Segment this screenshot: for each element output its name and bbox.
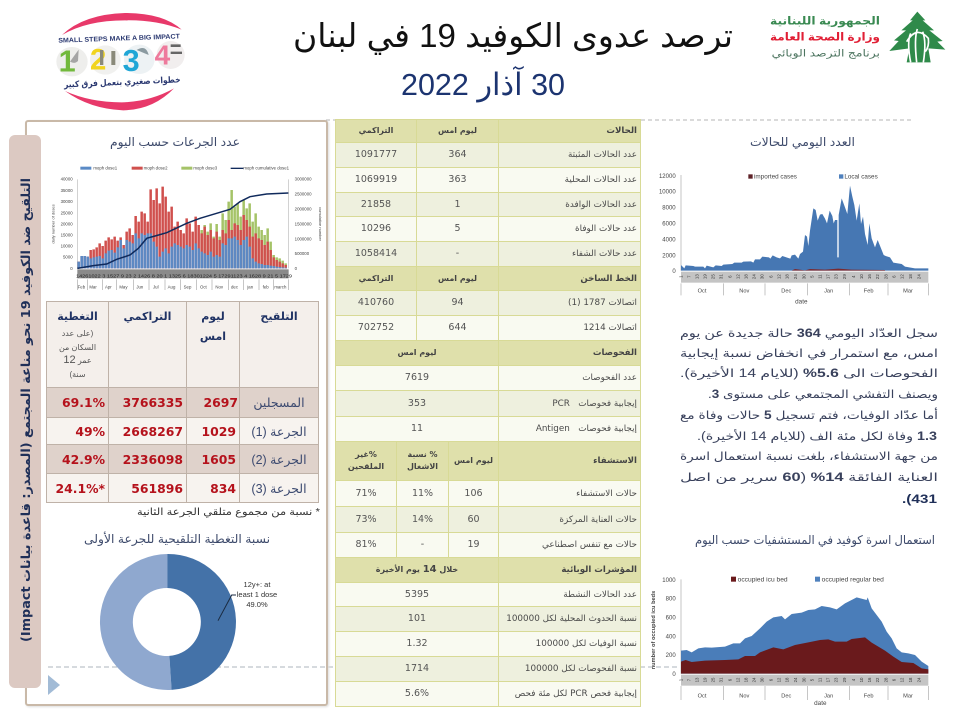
local cases area [681,186,928,271]
chart: daily cases: 6 [768,275,773,278]
month labels: Jan [824,693,833,699]
dose 2 bars [79,187,286,268]
donut label: least 1 dose [237,590,277,599]
section: tests: ليوم امس [398,348,436,357]
chart: hospital beds: 1 [679,678,684,681]
table header row: التلقيح [260,311,298,323]
table header row: سنة) [69,370,86,378]
month labels: Sep [184,285,192,290]
row: registered: المسجلين [253,396,305,410]
chart: daily cases: 12 [900,274,905,279]
legend: moph cumulative dose1 [243,166,290,171]
chart: hospital beds: 30 [801,677,806,682]
month labels: Oct [200,285,208,290]
chart: hospital beds: 10 [859,677,864,682]
heading: hospital beds: استعمال اسرة كوفيد في المستشفيات حسب اليوم [695,533,935,548]
month labels: Mar [903,693,913,699]
chart: daily cases: 13 [694,274,699,279]
sidebar text: التلقيح ضد الكوفيد 19 نحو مناعة المجتمع (المصدر: قاعدة بيانات Impact) [18,178,33,642]
logo: small steps make a big impact: 3 [123,44,140,78]
y axis: 0 [672,269,676,275]
logo: small steps make a big impact: 2 [90,44,106,77]
text block: daily summary: ويصنف التفشي المجتمعي على مستوى 3. [708,389,938,402]
table header row: ليوم امس [200,311,226,343]
axes labels: 30000 [61,199,73,204]
month labels: march [274,285,287,290]
month labels: Oct [698,289,707,295]
section: cases: إيجابية فحص PCR لكل مئة فحص [515,689,637,699]
month labels: Oct [698,693,707,699]
table header row: (على عدد [62,329,93,338]
chart: daily cases: 23 [834,274,839,279]
section: cases: عدد الفحوصات [582,373,637,383]
logo: small steps make a big impact: 1 [59,45,76,79]
section: cases: 11 [411,423,423,434]
text block: daily summary: من جهة الاستشفاء، بلغت نسبة استعمال اسرة [680,451,938,464]
section: cases: 1091777 [355,149,397,160]
table header row: التغطية [57,311,98,323]
chart: hospital beds: 5 [810,678,815,681]
chart: daily cases: 28 [883,274,888,279]
chart: hospital beds: 23 [834,677,839,682]
chart: daily cases: 4 [851,275,856,278]
section: cases: إيجابية فحوصات Antigen [536,424,637,434]
chart: hospital beds: 31 [718,677,723,682]
section: cases: عدد حالات الوفاة [575,224,637,234]
section: hospitalization: %غير [355,450,377,459]
logo: small steps make a big impact: SMALL STEPS MAKE A BIG IMPACT [58,33,180,45]
chart: hospital beds: 4 [851,678,856,681]
month labels: Nov [739,693,750,699]
month labels: Jul [153,285,159,290]
table: vaccination figures [46,301,319,503]
table header row: عمر 12 [63,354,92,366]
chart: hospital beds: 30 [760,677,765,682]
heading: daily cases: العدد اليومي للحالات [750,135,855,150]
logo: small steps make a big impact [56,13,184,110]
month labels: Jan [824,289,833,295]
y axis [662,578,676,678]
section: cases: 5395 [405,588,429,600]
section: cases: إيجابية فحوصات PCR [552,398,637,408]
row: dose 2 [47,445,318,473]
axes labels: 1500000 [295,221,312,226]
row: dose 1 [47,418,318,444]
month labels: Nov [215,285,224,290]
row: dose 3: 561896 [131,480,183,496]
chart: hospital beds: 6 [892,678,897,681]
chart: hospital beds: 18 [785,677,790,682]
chart: hospital beds: 22 [875,677,880,682]
section: cases: 60 [467,514,480,524]
icu bed area [681,637,928,674]
section: cases: 14% [412,514,433,524]
month labels: dec [231,285,239,290]
chart: daily cases: 22 [875,274,880,279]
section: cases: 1069919 [355,174,397,185]
donut label: 49.0% [246,600,268,609]
imported cases area [792,269,885,271]
chart: daily cases: 1 [679,275,684,278]
logo: ministry of public health: وزارة الصحة العامة [770,31,880,43]
section: epidemic indicators [336,558,640,582]
chart: hospital beds: 18 [743,677,748,682]
axes labels: 25000 [61,210,73,215]
donut label: 12y+: at [244,580,271,589]
row: dose 1: 2668267 [123,424,183,438]
legend [80,166,290,171]
donut chart: first dose coverage [100,554,277,690]
axes labels: 35000 [61,188,73,193]
section: cases: حالات الاستشفاء [576,488,637,498]
section: cases: 71% [355,488,377,498]
month labels: jan [246,285,254,290]
chart: daily cases: 11 [818,274,823,279]
chart: hospital beds [651,576,929,707]
axes labels: 500000 [295,251,310,256]
row: dose 1: الجرعة (1) [251,424,307,438]
month labels: Aug [168,285,176,290]
axes labels: 3000000 [295,177,312,182]
panel: vaccination [25,120,328,706]
legend: occupied icu bed [738,576,788,583]
section: hotline: ليوم امس [438,274,477,282]
section: cases: 1 [454,198,461,210]
cumulative line [77,193,288,268]
logo: ministry of public health: الجمهورية اللبنانية [770,15,880,27]
section: cases: 410760 [358,297,394,308]
section: tests: الفحوصات [593,348,637,358]
row: dose 1: 1029 [202,424,236,438]
chart: daily cases: 7 [687,275,692,278]
section: cases: - [456,248,459,259]
section: cases: عدد الحالات المحلية [565,175,637,185]
date band [77,269,289,278]
section: hotline: الخط الساخن [580,274,637,284]
legend [731,576,884,583]
section: cases: 21858 [361,198,391,210]
row: dose 3: 24.1%* [56,480,105,496]
legend [748,174,878,181]
section: cases: 7619 [405,372,429,383]
chart: hospital beds: 12 [900,677,905,682]
section: cases: اتصالات 1214 [583,323,637,333]
axes labels [51,177,323,271]
chart: hospital beds: 19 [702,677,707,682]
axes labels: 20000 [61,221,73,226]
legend: moph dose3 [193,166,218,171]
row: dose 2: الجرعة (2) [251,452,307,466]
logo: small steps make a big impact: خطوات صغيري بتعمل فرق كبير [63,74,181,90]
month labels: feb [263,285,269,290]
chart: daily cases: 31 [718,274,723,279]
chart: hospital beds: 16 [867,677,872,682]
chart: daily cases: 17 [826,274,831,279]
month labels: May [119,285,128,290]
section: cases: 101 [408,613,426,624]
month labels [681,283,928,305]
section: cases: 5 [454,223,461,234]
section: hospitalization: الملقحين [348,462,384,471]
axes labels: 0 [70,266,73,271]
chart: hospital beds: 18 [908,677,913,682]
section: hospitalization: ليوم امس [454,456,493,465]
axes labels: 10000 [61,244,73,249]
section: hospitalization: الاستشفاء [593,456,637,466]
section: cases: حالات مع تنفس اصطناعي [542,540,637,550]
section: hotline [336,267,640,290]
chart: daily cases: 18 [908,274,913,279]
row: dose 3 [47,474,318,502]
section: cases: 702752 [358,322,394,333]
row: dose 2: 42.9% [62,452,105,466]
section: cases: نسبة الوفيات لكل 100000 [536,639,637,649]
section: cases [336,120,640,706]
chart: hospital beds: number of occupied icu beds [651,591,657,669]
dose 3 bars [202,190,286,268]
text block: daily summary: أما عدّاد الوفيات، فتم تسجيل 5 حالات وفاة مع [680,407,938,423]
section: cases: 353 [408,398,426,408]
section: cases: 106 [464,488,483,498]
row: registered: 2697 [204,395,238,410]
y axis: 12000 [659,174,676,180]
chart: daily cases: 24 [752,274,757,279]
chart: hospital beds: 12 [735,677,740,682]
table header row: التراكمي [124,311,171,323]
section: cases: 81% [355,539,377,550]
chart: daily cases: 29 [842,274,847,279]
chart: daily cases: 10 [859,274,864,279]
table header row [47,302,318,502]
month labels [77,279,289,290]
section: hotline: التراكمي [359,274,393,282]
section: cases: 1.32 [406,638,428,649]
axes labels: 2500000 [295,192,312,197]
arrow marker [48,675,60,695]
chart: daily cases: 25 [710,274,715,279]
chart: hospital beds: 12 [777,677,782,682]
table header row: السكان من [59,342,96,352]
section: hospitalization: % نسبة [407,450,438,459]
sidebar: vaccination heading [9,135,41,688]
section: cases: ليوم امس [438,126,477,135]
section: cases: نسبة الفحوصات لكل 100000 [525,664,637,674]
chart: hospital beds: 17 [826,677,831,682]
y axis: 600 [666,616,676,622]
row: dose 1: 49% [75,424,105,438]
chart: daily cases: 24 [793,274,798,279]
axes labels: cumulative number [318,207,323,242]
section: cases: عدد الحالات المثبتة [568,150,637,160]
y axis: 1000 [662,578,676,584]
chart: daily cases: 6 [892,275,897,278]
section: cases: - [421,539,424,550]
month labels: date [795,298,808,305]
text block: daily summary: سجل العدّاد اليومي 364 حالة جديدة عن يوم [680,328,938,341]
section: cases: 94 [451,297,464,308]
chart: hospital beds: 6 [768,678,773,681]
row: dose 2: 2336098 [123,452,183,466]
section: cases: نسبة الحدوث المحلية لكل 100000 [506,614,637,624]
y axis: 4000 [662,237,676,243]
month labels: Feb [864,289,874,295]
section: cases: حالات العناية المركزة [559,514,637,524]
logo: ministry of public health: برنامج الترصد الوبائي [772,48,880,59]
chart: hospital beds: 25 [710,677,715,682]
section: cases: 1058414 [355,248,397,259]
month labels: Jun [136,285,144,290]
chart: hospital beds: 28 [883,677,888,682]
month labels: Dec [781,289,792,295]
chart: daily cases: 18 [743,274,748,279]
y axis: 6000 [662,222,676,228]
chart: daily cases: 24 [916,274,921,279]
y axis: 800 [666,597,676,603]
chart: daily cases: 30 [760,274,765,279]
regular bed area [681,597,928,674]
chart: daily cases: 19 [702,274,707,279]
chart: daily cases: 12 [777,274,782,279]
month labels: Feb [864,693,874,699]
legend: moph dose1 [93,166,118,171]
section: cases: عدد الحالات النشطة [563,590,637,600]
heading: first dose coverage: نسبة التغطية التلقيحية للجرعة الأولى [84,531,270,547]
section: cases: 10296 [361,223,391,234]
chart: hospital beds: 24 [793,677,798,682]
text block: daily summary [680,328,938,506]
row: dose 3: 834 [210,480,236,496]
date subtitle: 30 آذار 2022 [401,65,565,103]
month labels: Apr [105,285,112,290]
logo: ministry of public health [770,12,946,62]
logo: small steps make a big impact: 4 [155,39,171,70]
section: cases: 363 [448,174,467,185]
chart: daily cases: 5 [810,275,815,278]
month labels: Mar [89,285,97,290]
section: cases: عدد الحالات الوافدة [565,200,637,210]
chart: daily cases: 16 [867,274,872,279]
chart: hospital beds: 24 [916,677,921,682]
heading: doses per day: عدد الجرعات حسب اليوم [110,135,240,150]
month labels: Feb [78,285,86,290]
row: dose 2: 1605 [202,452,236,466]
section: cases: 5.6% [405,688,429,699]
month labels [681,686,928,707]
legend: imported cases [754,174,797,181]
date band [681,675,928,686]
chart: hospital beds: 7 [687,678,692,681]
section: cases: الحالات [606,126,637,136]
footnote: * نسبة من مجموع متلقي الجرعة الثانية [137,507,320,518]
text block: daily summary: العناية الفائقة 14% (60 سرير من اصل [680,472,938,485]
section: epidemic indicators: خلال 14 يوم الأخيرة [376,564,458,575]
section: cases: التراكمي [359,126,393,135]
chart: hospital beds: 29 [842,677,847,682]
donut label [237,580,277,609]
chart: hospital beds: 24 [752,677,757,682]
section: cases: 19 [467,539,480,550]
month labels: Mar [903,289,913,295]
section: hospitalization [336,442,640,480]
dose 1 bars [79,233,286,268]
text block: daily summary: .(431 [902,494,938,506]
chart: daily vaccine doses [51,166,323,290]
section: cases: 644 [448,322,467,333]
legend: occupied regular bed [822,576,884,583]
section: hospitalization: الاشغال [407,462,438,471]
axes labels: 1000000 [295,236,312,241]
y axis: 10000 [659,190,676,196]
chart: daily cases: 12 [735,274,740,279]
text block: daily summary: الفحوصات الى 5.6% (للايام 14 الأخيرة). [680,366,938,381]
chart: hospital beds: 13 [694,677,699,682]
month labels: date [814,700,827,707]
legend: Local cases [844,174,878,181]
y axis: 200 [666,653,676,659]
section: cases: 11% [412,488,433,498]
y axis: 2000 [662,253,676,259]
chart: daily cases: 6 [727,275,732,278]
y axis: 8000 [662,206,676,212]
section: cases: 1714 [405,663,429,674]
row: registered: 69.1% [62,395,105,410]
axes labels: 15000 [61,232,73,237]
section: cases: اتصالات 1787 (1) [568,298,637,308]
axes labels: 40000 [61,177,73,182]
axes labels: 5000 [63,255,73,260]
chart: hospital beds: 6 [727,678,732,681]
chart: daily vaccine doses: 14261022 3 1527 9 23 2 1426 8 20 1 1325 6 18301224 5 17291123 4 1628 9 21 5 1729 [76,274,292,279]
section: epidemic indicators: المؤشرات الوبائية [561,565,637,575]
section: cases: عدد حالات الشفاء [572,249,637,259]
legend: moph dose2 [144,166,168,171]
axes labels: 2000000 [295,206,312,211]
section: cases: 364 [448,149,467,160]
section: cases: 73% [355,514,377,524]
axes labels: 0 [295,266,298,271]
chart: hospital beds: 11 [818,677,823,682]
row: dose 3: الجرعة (3) [251,482,307,496]
donut leader line [218,595,236,621]
chart: daily cases: 18 [785,274,790,279]
text block: daily summary: امس، مع استمرار في انخفاض نسبة إيجابية [680,348,938,361]
table: surveillance figures [335,119,641,707]
axes labels: daily number of doses [51,204,56,244]
month labels: Dec [781,693,792,699]
row: registered [47,388,318,417]
y axis [659,174,676,275]
text block: daily summary: 1.3 وفاة لكل مئة الف (للايام 14 الأخيرة). [697,429,937,444]
title: ترصد عدوى الكوفيد 19 في لبنان [293,17,733,55]
date band [681,272,928,283]
chart: daily cases [659,174,929,305]
section: tests [336,341,640,365]
y axis: 400 [666,634,676,640]
y axis: 0 [672,672,676,678]
chart: daily cases: 30 [801,274,806,279]
row: registered: 3766335 [123,395,183,410]
month labels: Nov [739,289,750,295]
